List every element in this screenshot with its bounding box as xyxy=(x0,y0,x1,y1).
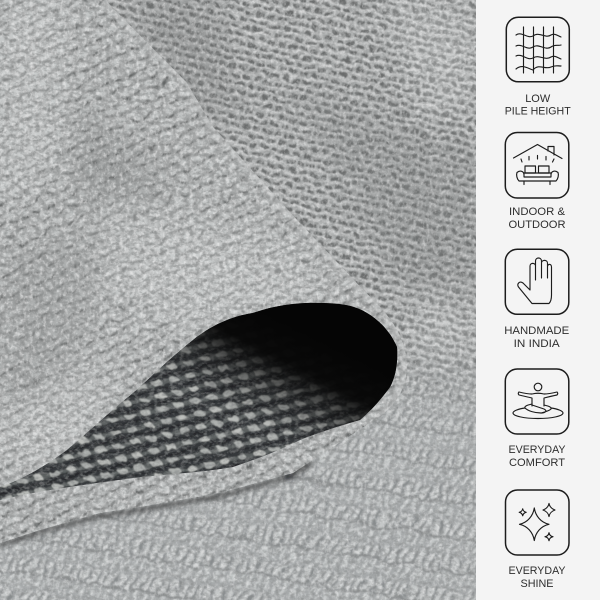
icon: sparkles xyxy=(506,490,569,555)
label: handmade in India: IN INDIA xyxy=(514,338,560,350)
feature: low pile height xyxy=(505,17,571,117)
panel: feature sidebar xyxy=(476,0,600,600)
label: everyday shine xyxy=(508,565,566,590)
panel: rolled rug front xyxy=(0,0,407,543)
label: everyday shine: SHINE xyxy=(520,578,554,590)
label: low pile height xyxy=(505,93,571,118)
rug surface tonal bands xyxy=(120,0,476,360)
label: handmade in India xyxy=(504,325,570,350)
label: low pile height: LOW xyxy=(525,93,550,105)
icon: raised hand xyxy=(505,249,569,314)
panel: dark hollow of the roll xyxy=(166,302,398,436)
label: everyday shine: EVERYDAY xyxy=(508,565,566,577)
panel: rug underside weave xyxy=(0,302,398,500)
feature: everyday shine xyxy=(506,490,569,590)
panel: lower rug surface xyxy=(0,350,476,600)
feature: everyday comfort xyxy=(505,369,569,469)
label: everyday comfort: EVERYDAY xyxy=(508,444,566,456)
panel: roll light rim xyxy=(105,0,407,416)
feature: handmade in India xyxy=(504,249,570,350)
label: indoor and outdoor: OUTDOOR xyxy=(508,219,566,231)
feature: indoor and outdoor xyxy=(505,132,569,231)
icon: seated meditation figure xyxy=(505,369,569,434)
label: everyday comfort xyxy=(508,444,566,469)
label: indoor and outdoor xyxy=(508,206,566,231)
icon: house with sofa xyxy=(505,132,569,198)
label: indoor and outdoor: INDOOR & xyxy=(509,206,565,218)
label: low pile height: PILE HEIGHT xyxy=(505,106,571,118)
rug surface woven rows xyxy=(108,0,476,410)
icon: pile weave xyxy=(506,17,569,82)
label: handmade in India: HANDMADE xyxy=(504,325,570,337)
label: everyday comfort: COMFORT xyxy=(509,457,565,469)
panel: shadow under lip xyxy=(0,462,310,545)
